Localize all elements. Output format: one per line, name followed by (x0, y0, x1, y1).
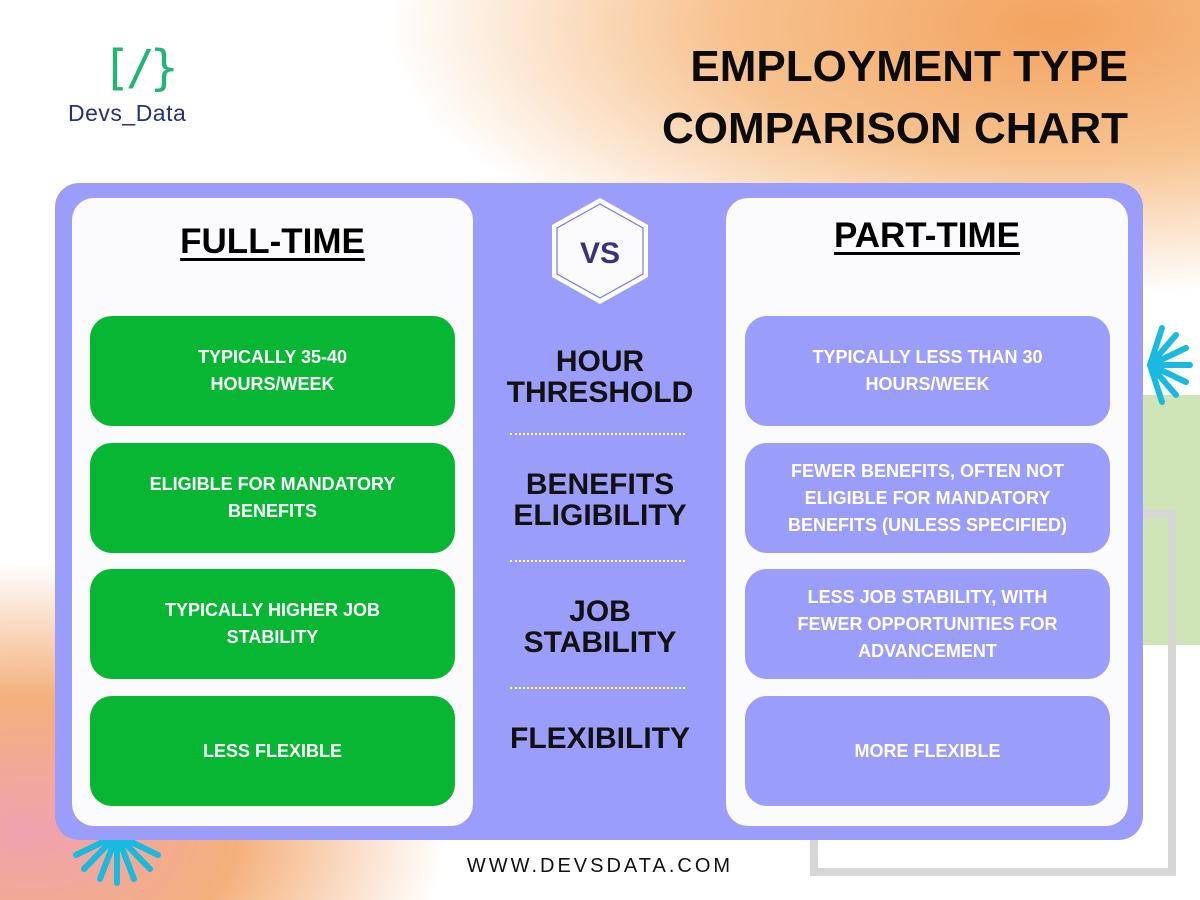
panel: part-time (726, 198, 1128, 826)
title (662, 42, 1128, 153)
label: benefits eligibility: BENEFITS (526, 468, 674, 501)
label: job stability: STABILITY (524, 626, 676, 659)
box: full-time benefits (90, 443, 455, 553)
green decorative square (1100, 395, 1200, 645)
label: job stability: JOB (569, 595, 631, 628)
label: hour threshold (506, 345, 693, 409)
label: flexibility: FLEXIBILITY (510, 722, 690, 755)
main panel (55, 183, 1143, 840)
box: full-time flexibility: LESS FLEXIBLE (203, 740, 342, 760)
label: job stability (524, 595, 676, 659)
box: full-time flexibility (90, 696, 455, 806)
heading: part-time: PART-TIME (834, 216, 1020, 255)
heading: full-time: FULL-TIME (180, 222, 365, 261)
icon: burst right (1147, 325, 1193, 405)
panel: full-time (72, 198, 473, 826)
box: full-time stability: TYPICALLY HIGHER JOB STABILITY (165, 600, 380, 647)
box: part-time hours (745, 316, 1110, 426)
box: full-time hours (90, 316, 455, 426)
box: full-time hours: TYPICALLY 35-40 HOURS/WEEK (198, 347, 347, 394)
icon: vs hexagon (552, 198, 648, 304)
gray outline square (810, 510, 1176, 876)
label: hour threshold: HOUR (556, 345, 644, 378)
icon: vs hexagon: VS (580, 237, 620, 270)
box: part-time benefits: FEWER BENEFITS, OFTEN NOT ELIGIBLE FOR MANDATORY BENEFITS (UNLESS SPECIFIED) (788, 460, 1067, 534)
icon: burst bottom left (73, 840, 161, 886)
logo: Devs_Data (68, 100, 186, 126)
box: part-time flexibility (745, 696, 1110, 806)
label: benefits eligibility (513, 468, 687, 532)
box: part-time hours: TYPICALLY LESS THAN 30 HOURS/WEEK (812, 347, 1043, 394)
label: hour threshold: THRESHOLD (507, 376, 693, 409)
logo: [/} (102, 40, 174, 96)
title: COMPARISON CHART (662, 104, 1128, 153)
box: part-time stability (745, 569, 1110, 679)
logo (68, 40, 186, 126)
box: full-time benefits: ELIGIBLE FOR MANDATORY BENEFITS (150, 474, 395, 521)
box: full-time stability (90, 569, 455, 679)
box: part-time benefits (745, 443, 1110, 553)
box: part-time flexibility: MORE FLEXIBLE (854, 740, 1000, 760)
label: benefits eligibility: ELIGIBILITY (513, 499, 687, 532)
footer url: WWW.DEVSDATA.COM (467, 855, 733, 877)
background glow bottom left (0, 560, 450, 900)
box: part-time stability: LESS JOB STABILITY, WITH FEWER OPPORTUNITIES FOR ADVANCEMENT (797, 586, 1058, 660)
title: EMPLOYMENT TYPE (690, 42, 1128, 91)
background glow top right (380, 0, 1200, 300)
